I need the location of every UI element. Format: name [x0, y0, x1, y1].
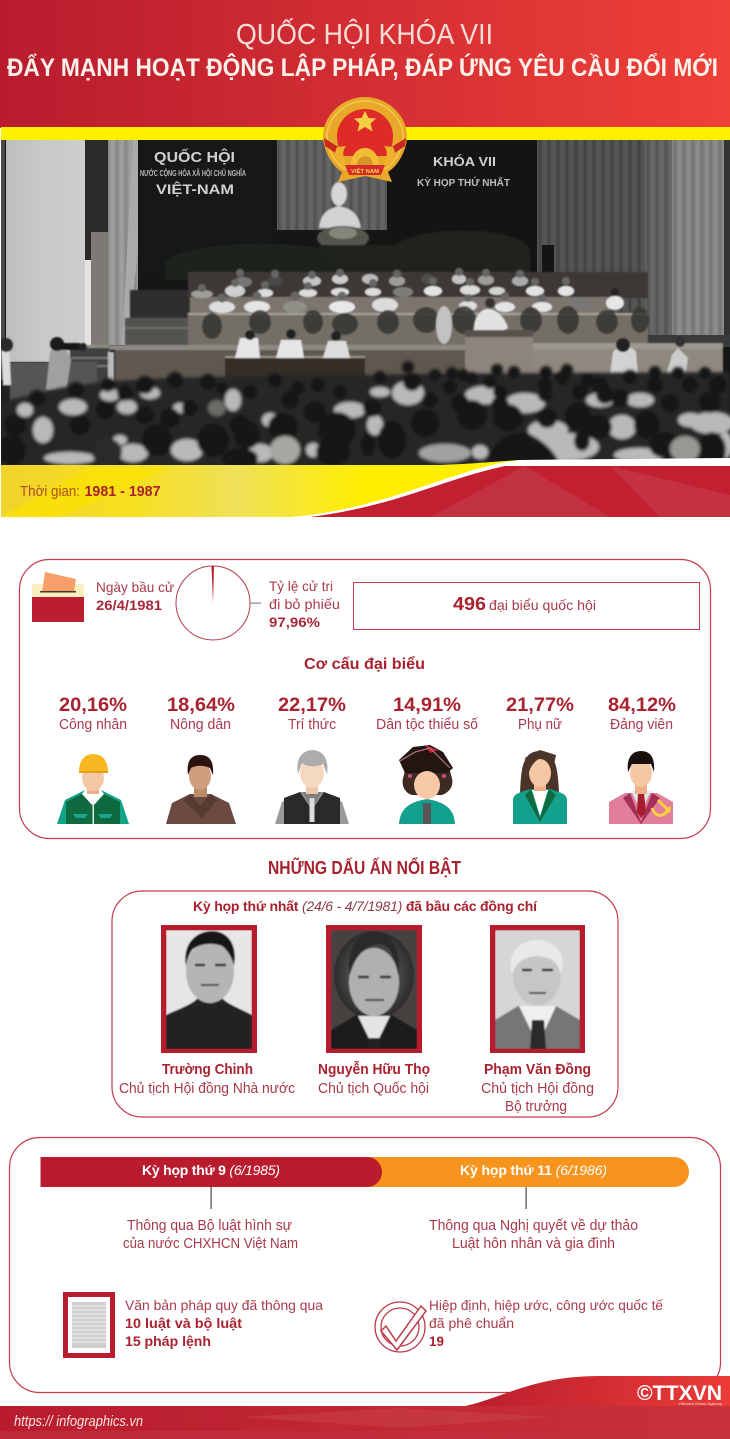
caption: Phạm Văn Đồng — [481, 1061, 594, 1115]
stat: farmers: Nông dân — [170, 716, 231, 733]
text: criminal code: của nước CHXHCN Việt Nam — [123, 1236, 298, 1252]
stat: intellectuals: 22,17% — [278, 695, 346, 716]
connector: session 9 — [210, 1187, 212, 1209]
caption: Nguyễn Hữu Thọ — [318, 1061, 430, 1097]
stat: intellectuals: Trí thức — [288, 716, 336, 733]
panel: later sessions — [10, 1138, 720, 1392]
text: marriage law — [429, 1218, 638, 1252]
backdrop sign left: NƯỚC CỘNG HÒA XÃ HỘI CHỦ NGHĨA — [140, 167, 246, 178]
text: treaties — [429, 1297, 663, 1349]
time range: 1981 - 1987 — [84, 483, 160, 500]
delegates box: đại biểu quốc hội — [489, 597, 596, 613]
icon: check mark — [375, 1302, 426, 1352]
footer url: https:// infographics.vn — [14, 1413, 143, 1430]
bust and stage — [0, 182, 723, 417]
backdrop sign left: QUỐC HỘI — [154, 148, 235, 166]
stat: party members — [608, 695, 676, 733]
stat: intellectuals — [278, 695, 346, 733]
text: legal documents: 10 luật và bộ luật — [125, 1315, 242, 1331]
timeline bar: session 9: Kỳ họp thứ 9 (6/1985) — [142, 1162, 280, 1178]
panel: first session — [112, 891, 618, 1117]
text: marriage law: Luật hôn nhân và gia đình — [452, 1236, 615, 1252]
emblem: VIỆT NAM — [351, 167, 379, 175]
portrait: Nguyễn Hữu Thọ — [326, 925, 422, 1053]
stat: workers: Công nhân — [59, 716, 127, 733]
timeline bar: session 11 — [360, 1157, 689, 1187]
stat: women: 21,77% — [506, 695, 574, 716]
header banner — [0, 0, 730, 128]
panel: election and delegates — [20, 560, 710, 838]
emblem — [323, 97, 407, 182]
timeline bar: session 9 — [40, 1157, 382, 1187]
text: treaties: Hiệp định, hiệp ước, công ước quốc tế — [429, 1297, 663, 1313]
footer band — [0, 1376, 730, 1439]
stat: party members: 84,12% — [608, 695, 676, 716]
stat: women — [506, 695, 574, 733]
heads — [0, 361, 727, 468]
text: legal documents — [125, 1297, 323, 1349]
heading: delegate structure: Cơ cấu đại biểu — [304, 655, 425, 673]
floor and cameraman — [9, 361, 98, 401]
stat: ethnic minorities: 14,91% — [393, 695, 461, 716]
stat: ethnic minorities — [376, 695, 479, 733]
stat: workers: 20,16% — [59, 695, 127, 716]
election date: 26/4/1981 — [96, 597, 162, 613]
turnout text: Tỷ lệ cử tri — [269, 578, 333, 594]
delegate heads — [198, 268, 619, 302]
icon: farmer — [166, 755, 236, 824]
crowd — [0, 361, 730, 470]
standing people right — [610, 347, 638, 375]
backdrop sign left: VIỆT-NAM — [156, 180, 234, 197]
session heading: Kỳ họp thứ nhất (24/6 - 4/7/1981) đã bầu các đồng chí — [193, 898, 538, 914]
backdrop sign right: KHÓA VII — [433, 154, 496, 169]
text: treaties: 19 — [429, 1333, 444, 1349]
stat: party members: Đảng viên — [610, 716, 673, 733]
caption: Phạm Văn Đồng: Phạm Văn Đồng — [484, 1061, 591, 1078]
election date — [96, 579, 174, 613]
turnout text: 97,96% — [269, 614, 321, 630]
turnout text: đi bỏ phiếu — [269, 596, 340, 612]
connector: session 11 — [526, 1187, 527, 1209]
caption: Nguyễn Hữu Thọ: Nguyễn Hữu Thọ — [318, 1061, 430, 1078]
backdrop sign right — [417, 154, 511, 189]
icon: intellectual — [275, 750, 349, 824]
pie chart: turnout — [176, 566, 261, 640]
speaker and podium — [474, 309, 508, 330]
back row delegates — [191, 274, 624, 313]
time banner — [1, 458, 730, 517]
delegates box — [354, 582, 700, 630]
caption: Trường Chinh: Chủ tịch Hội đồng Nhà nước — [119, 1081, 295, 1097]
yellow band — [1, 127, 730, 140]
text: criminal code: Thông qua Bộ luật hình sự — [127, 1218, 292, 1234]
text: marriage law: Thông qua Nghị quyết về dự thảo — [429, 1218, 638, 1234]
stat: ethnic minorities: Dân tộc thiểu số — [376, 716, 479, 733]
time label: Thời gian: — [20, 483, 80, 500]
text: treaties: đã phê chuẩn — [429, 1315, 514, 1331]
caption: Trường Chinh: Trường Chinh — [162, 1061, 253, 1078]
timeline bar: session 11: Kỳ họp thứ 11 (6/1986) — [460, 1162, 607, 1178]
turnout text — [269, 578, 340, 630]
delegates box: 496 — [453, 594, 486, 614]
stat: women: Phụ nữ — [518, 716, 562, 733]
icon: document — [66, 1294, 112, 1356]
caption: Trường Chinh — [119, 1061, 295, 1097]
election date: Ngày bầu cử — [96, 579, 174, 595]
icon: party member — [609, 751, 673, 824]
caption: Phạm Văn Đồng: Chủ tịch Hội đồng — [481, 1081, 594, 1097]
stat: farmers — [167, 695, 235, 733]
text: legal documents: Văn bản pháp quy đã thông qua — [125, 1297, 323, 1313]
stat: workers — [59, 695, 127, 733]
caption: Phạm Văn Đồng: Bộ trưởng — [505, 1099, 567, 1115]
icon: ethnic minority woman — [399, 745, 455, 824]
portrait: Trường Chinh — [161, 925, 257, 1053]
caption: Nguyễn Hữu Thọ: Chủ tịch Quốc hội — [318, 1081, 429, 1097]
logo: ©TTXVN — [637, 1382, 722, 1405]
tier desks — [188, 272, 648, 298]
stat: farmers: 18,64% — [167, 695, 235, 716]
presidium — [224, 358, 366, 378]
desk plants — [202, 306, 649, 339]
text: legal documents: 15 pháp lệnh — [125, 1333, 211, 1349]
portrait: Phạm Văn Đồng — [490, 925, 585, 1053]
backdrop sign right: KỲ HỌP THỨ NHẤT — [417, 176, 511, 189]
icon: worker — [57, 754, 129, 824]
heading: highlights: NHỮNG DẤU ẤN NỔI BẬT — [268, 857, 461, 878]
photo: National Assembly session — [0, 140, 730, 470]
shirts — [17, 381, 730, 464]
icon: woman — [513, 750, 567, 824]
text: criminal code — [123, 1218, 298, 1252]
icon: ballot box — [32, 572, 84, 622]
logo: Vietnam News Agency — [678, 1401, 722, 1406]
backdrop sign left — [140, 148, 246, 197]
title line 1: QUỐC HỘI KHÓA VII — [236, 17, 493, 51]
